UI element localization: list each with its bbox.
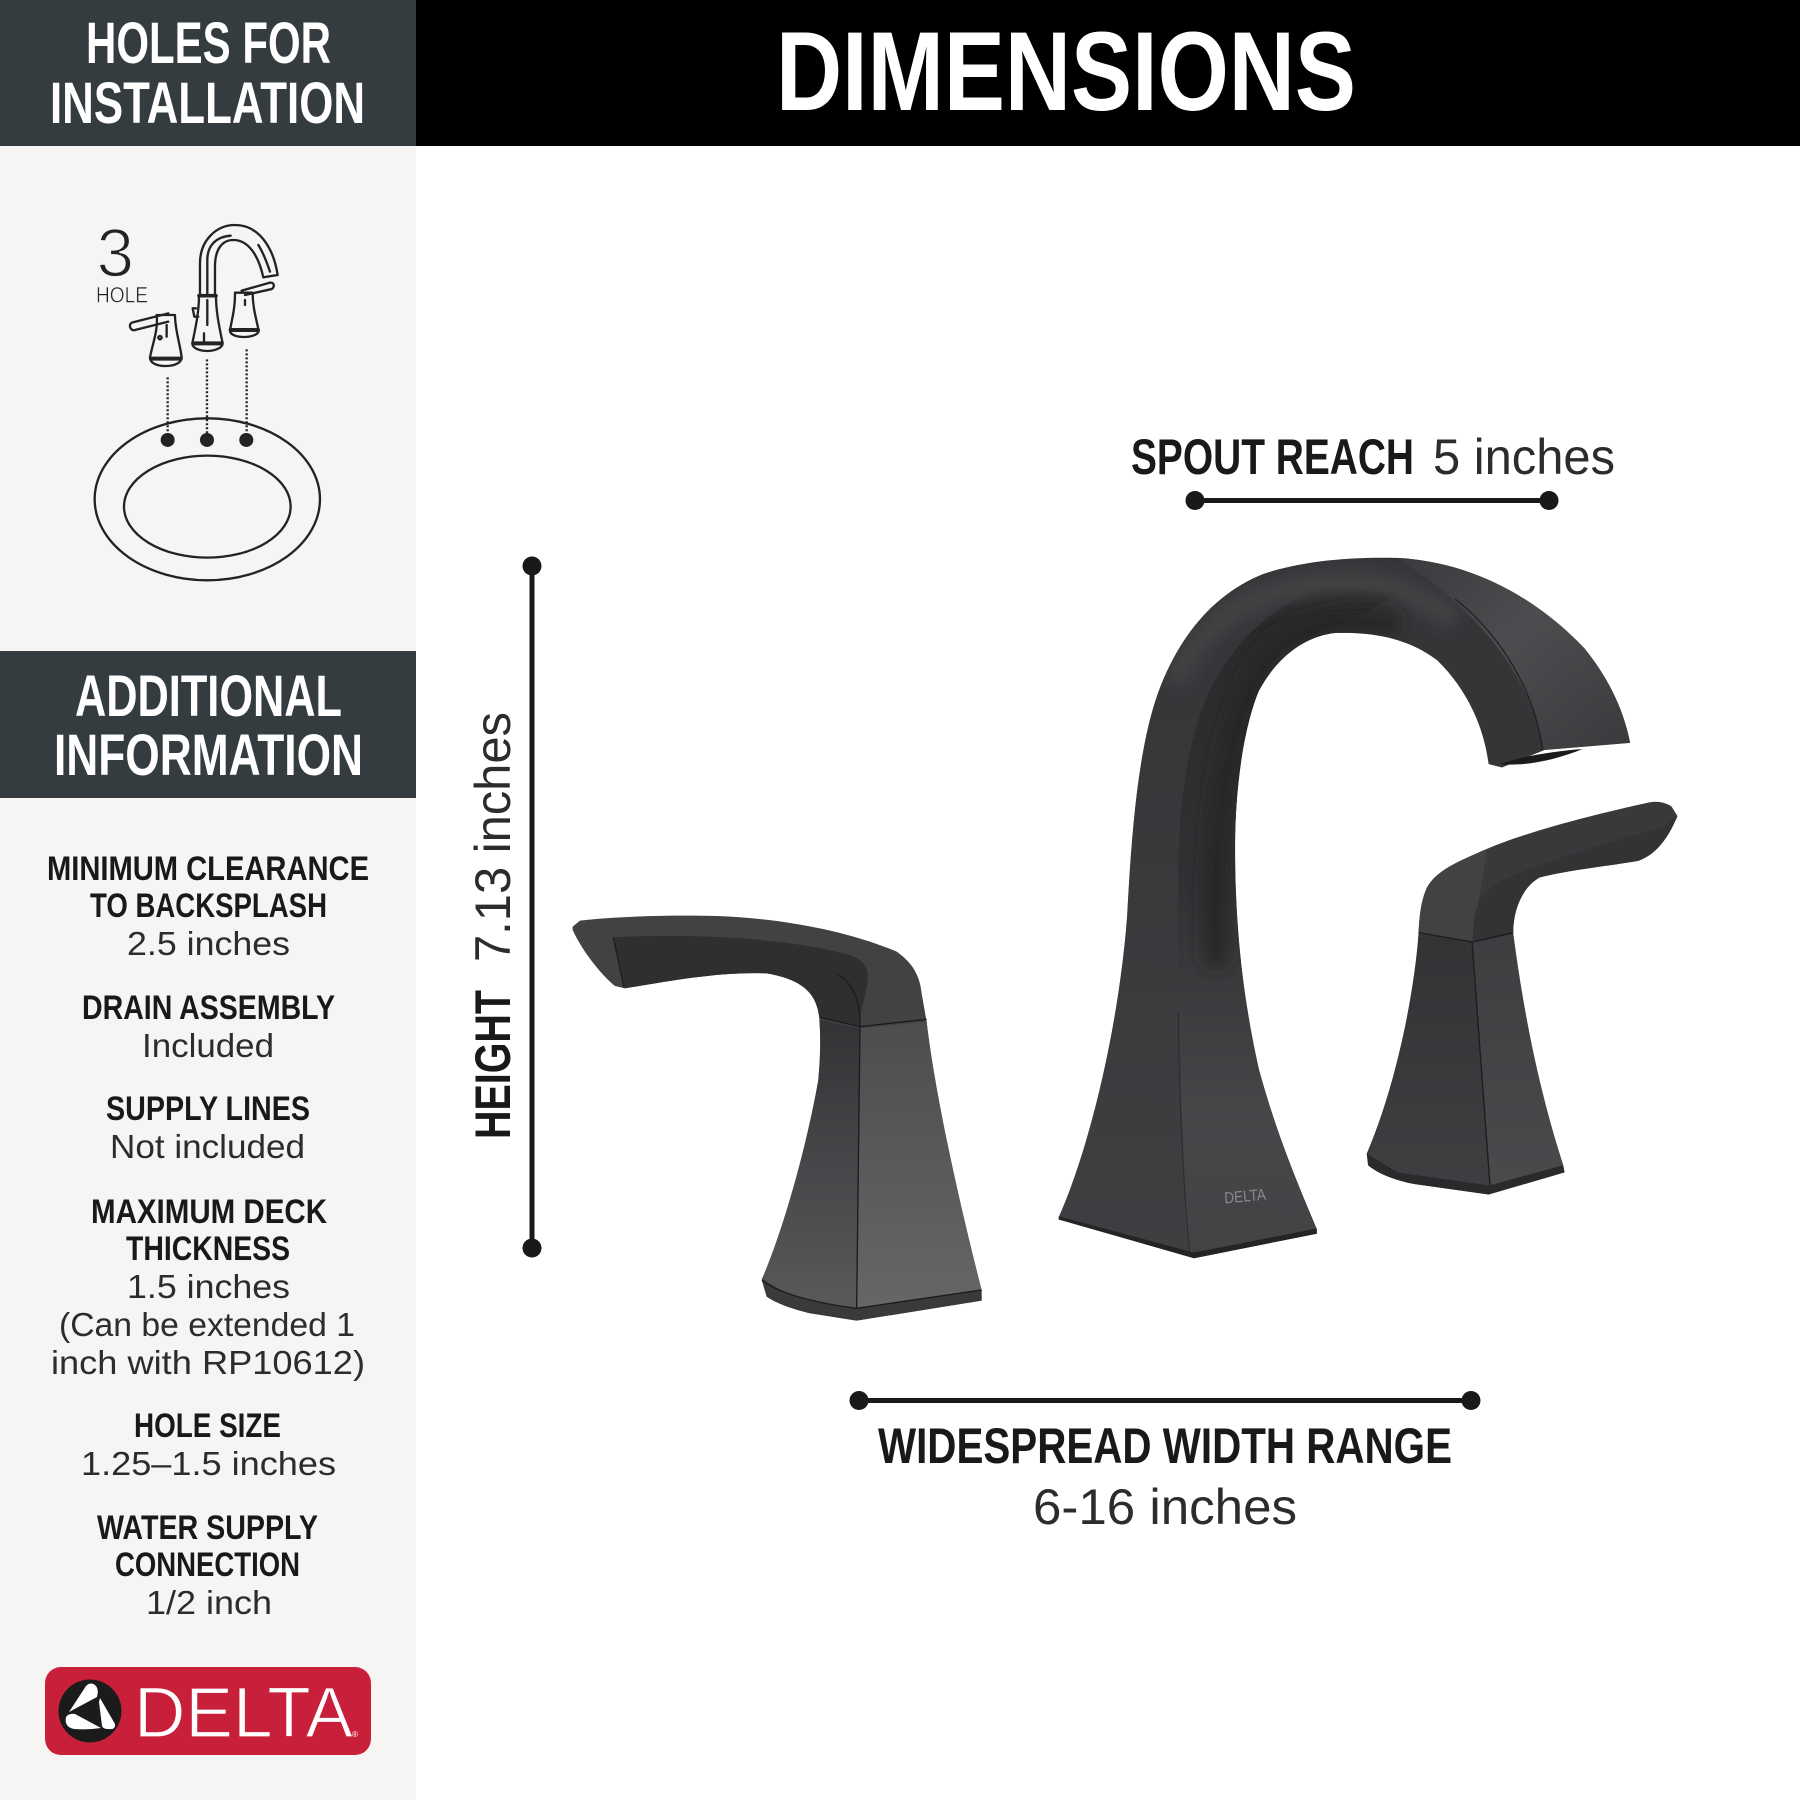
spout facet line (1178, 1012, 1190, 1253)
title: dimensions: DIMENSIONS (776, 9, 1356, 134)
text block: maximum deck thickness: MAXIMUM DECK (91, 1193, 327, 1231)
text block: minimum clearance: TO BACKSPLASH (90, 887, 327, 925)
text block: water supply connection (97, 1509, 318, 1621)
text block: minimum clearance: MINIMUM CLEARANCE (47, 850, 369, 888)
text block: hole size (81, 1407, 336, 1482)
text block: supply lines: SUPPLY LINES (106, 1090, 310, 1128)
text block: maximum deck thickness (51, 1193, 365, 1381)
text block: hole size: HOLE SIZE (134, 1407, 281, 1445)
icon: center spout (192, 225, 278, 351)
spout front face (1178, 587, 1397, 1253)
spout tip face (1397, 558, 1630, 750)
text block: drain assembly: DRAIN ASSEMBLY (82, 989, 335, 1027)
header: additional information (0, 651, 416, 798)
dimension: spout reach (1131, 429, 1615, 510)
header: holes for installation: INSTALLATION (50, 71, 365, 136)
text block: water supply connection: CONNECTION (115, 1546, 300, 1584)
dimension: height (465, 556, 542, 1258)
logo: delta (45, 1667, 371, 1755)
dimension: height: 7.13 inches (465, 712, 521, 962)
text block: supply lines: Not included (110, 1128, 305, 1165)
spout base trim (1059, 1216, 1317, 1258)
left handle left face (762, 1020, 860, 1308)
header: holes for installation: HOLES FOR (86, 11, 331, 76)
header: holes for installation (0, 0, 416, 146)
faucet spout (1059, 558, 1630, 1258)
right handle lever top (1419, 849, 1486, 942)
spout edge line (1455, 599, 1542, 750)
text block: water supply connection: 1/2 inch (146, 1584, 272, 1621)
icon: right handle (230, 283, 274, 337)
text block: maximum deck thickness: 1.5 inches (127, 1268, 290, 1305)
text block: drain assembly: Included (142, 1027, 274, 1064)
left handle edges (613, 937, 982, 1308)
dimension: widespread width range: 6-16 inches (1033, 1479, 1297, 1535)
icon: mounting holes (161, 433, 253, 447)
dimension: widespread width range (850, 1391, 1480, 1535)
left handle base trim (762, 1279, 982, 1321)
left handle (573, 916, 982, 1321)
right handle body left face (1368, 935, 1489, 1186)
left handle right face (857, 1022, 982, 1308)
right handle (1367, 802, 1677, 1195)
spout aerator (1500, 749, 1582, 765)
title: dimensions (416, 0, 1800, 146)
text block: maximum deck thickness: THICKNESS (126, 1230, 290, 1268)
left handle lever underside (613, 936, 868, 1027)
dimension: widespread width range: WIDESPREAD WIDTH RANGE (878, 1418, 1452, 1474)
icon: sink basin (95, 418, 320, 580)
text block: drain assembly (82, 989, 335, 1064)
sidebar background (0, 0, 416, 1800)
spout brand mark: DELTA (1224, 1186, 1267, 1208)
dotted guide lines (168, 349, 247, 434)
text block: maximum deck thickness: (Can be extended 1 (59, 1306, 355, 1343)
text block: minimum clearance (47, 850, 369, 962)
header: additional information: INFORMATION (54, 723, 363, 788)
icon: left handle (130, 313, 182, 366)
text block: hole size: 1.25–1.5 inches (81, 1445, 336, 1482)
logo: delta: DELTA (134, 1674, 354, 1753)
text block: minimum clearance: 2.5 inches (127, 925, 290, 962)
icon label: 3 hole (96, 216, 148, 307)
logo: delta: ® (352, 1730, 358, 1739)
icon label: 3 hole: HOLE (96, 282, 148, 307)
dimension: spout reach: SPOUT REACH (1131, 429, 1414, 485)
icon label: 3 hole: 3 (97, 216, 134, 292)
text block: maximum deck thickness: inch with RP10612) (51, 1344, 365, 1381)
spout inner shadow (1216, 622, 1397, 965)
dimension: height: HEIGHT (465, 990, 521, 1139)
text block: water supply connection: WATER SUPPLY (97, 1509, 318, 1547)
icon: three hole faucet and sink (95, 216, 320, 580)
header: additional information: ADDITIONAL (75, 664, 342, 729)
spout top highlight (1174, 582, 1455, 682)
right handle lever underside (1473, 816, 1677, 941)
right handle base trim (1367, 1153, 1565, 1195)
dimension: spout reach: 5 inches (1433, 429, 1615, 485)
spout shading (1059, 558, 1630, 1253)
right handle body right face (1472, 935, 1563, 1186)
text block: supply lines (106, 1090, 310, 1165)
right handle edges (1419, 933, 1513, 1186)
spout left face (1059, 574, 1263, 1251)
